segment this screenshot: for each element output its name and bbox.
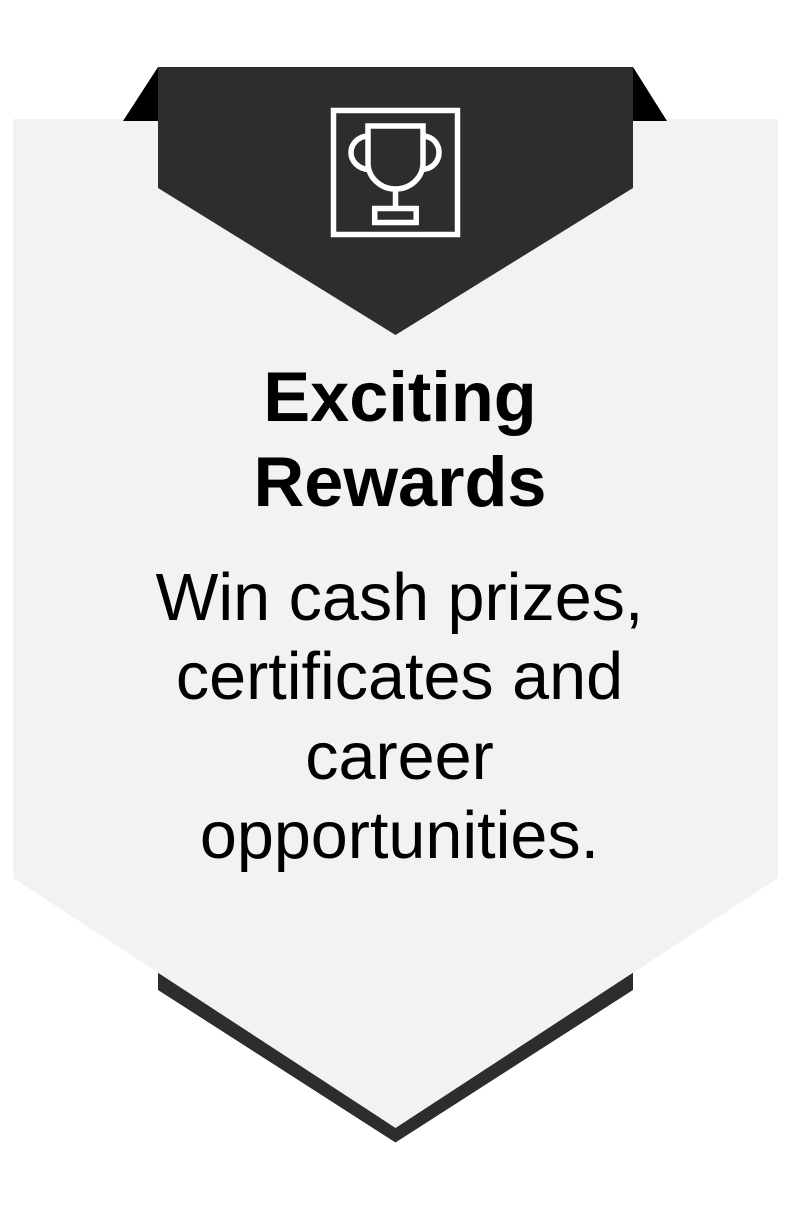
body text: opportunities. xyxy=(200,799,599,873)
bottom ribbon edge xyxy=(158,972,633,1142)
heading: Exciting xyxy=(263,357,537,436)
icon: trophy in square frame xyxy=(334,110,458,234)
body text: Win cash prizes, xyxy=(156,561,643,635)
right ribbon fold xyxy=(620,67,667,121)
body text: certificates and xyxy=(176,640,623,714)
top ribbon banner xyxy=(158,67,633,335)
heading xyxy=(253,357,547,521)
body text: career xyxy=(305,720,494,794)
heading: Rewards xyxy=(253,442,547,521)
body text xyxy=(156,561,643,873)
left ribbon fold xyxy=(123,67,170,121)
